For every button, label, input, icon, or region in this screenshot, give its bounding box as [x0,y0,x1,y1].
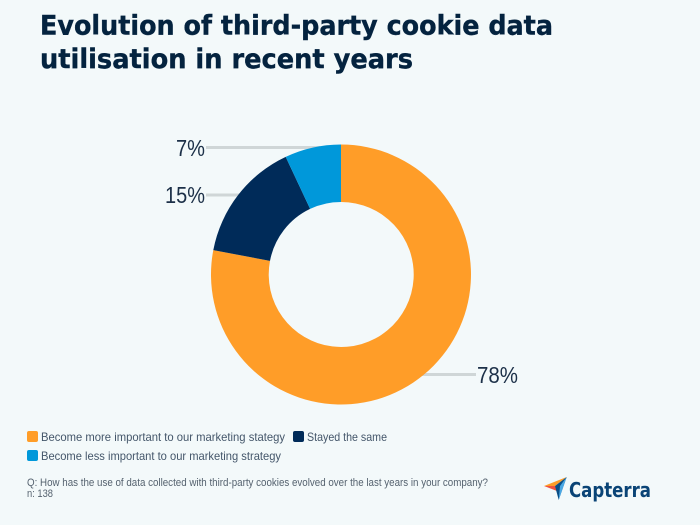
title: utilisation in recent years [40,44,413,75]
segment: 15% stayed the same [213,157,310,261]
logo: Capterra: Capterra [569,478,651,502]
label: 7%: 7% [176,135,205,161]
donut chart [165,135,518,404]
title [40,10,553,75]
label: 78%: 78% [477,362,518,388]
label: 15%: 15% [165,182,205,208]
leader lines [206,148,476,374]
survey question note [27,477,488,500]
legend [27,430,387,463]
segment: 78% more important [211,144,471,404]
survey question note: Q: How has the use of data collected with third-party cookies evolved over the last years in your company? [27,477,488,489]
title: Evolution of third-party cookie data [40,10,553,42]
legend item: more important: Become more important to our marketing stategy [41,430,285,444]
segment: 7% less important [286,144,341,209]
survey question note: n: 138 [27,488,53,500]
logo: Capterra [544,477,651,502]
legend item: less important: Become less important to our marketing strategy [41,449,281,463]
legend item: stayed the same: Stayed the same [307,430,387,444]
